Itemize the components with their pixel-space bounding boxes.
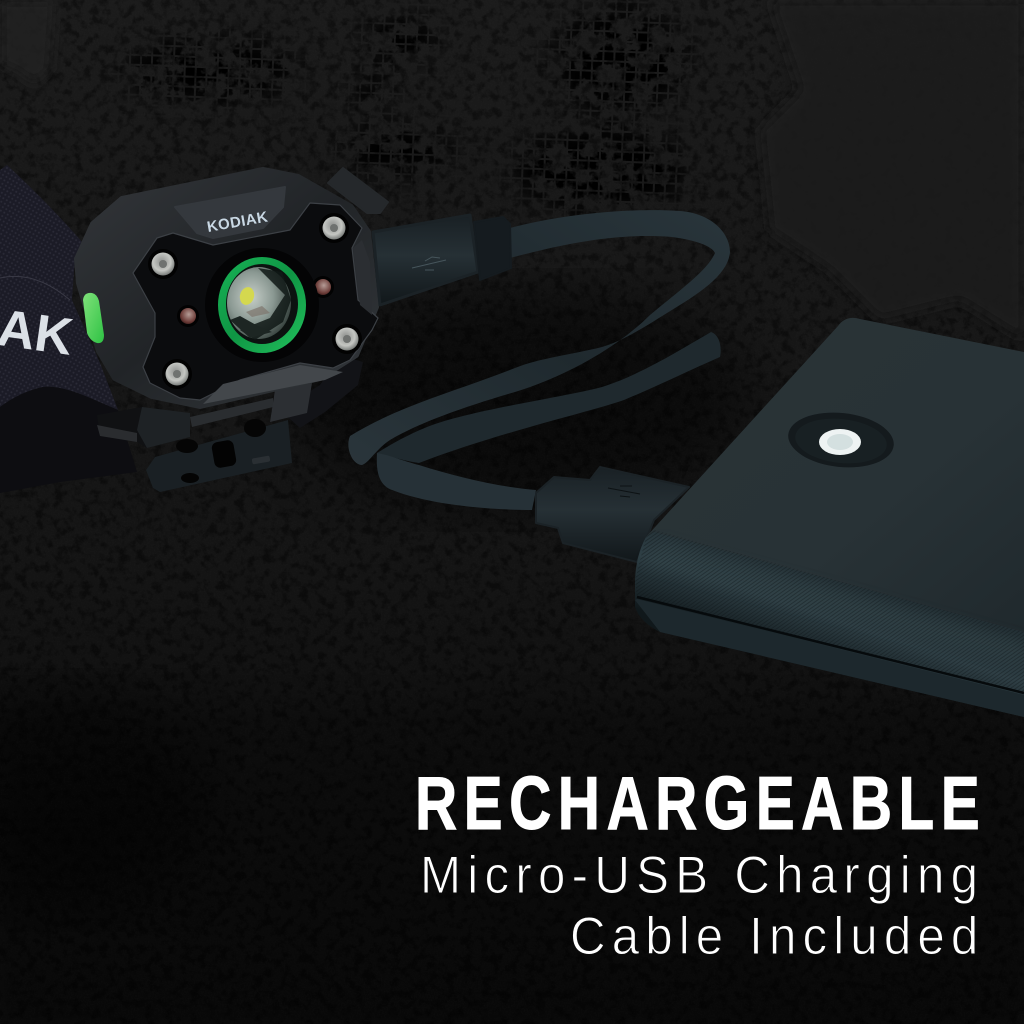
lower clip (146, 419, 292, 492)
mode knob (328, 168, 388, 213)
right facet (353, 240, 372, 315)
mount strip (97, 425, 137, 442)
lens and green ring (205, 248, 319, 362)
logo plate (175, 187, 285, 238)
power bank (635, 318, 1024, 717)
power button (785, 408, 897, 472)
top face (646, 318, 1024, 632)
screws (148, 213, 362, 389)
red indicator LEDs (177, 276, 334, 327)
seam line (637, 597, 1024, 693)
rear arc band (280, 355, 363, 428)
USB symbol (412, 257, 446, 270)
body shell (77, 170, 376, 406)
subtitle line 2: Cable Included (570, 906, 978, 965)
edge band (635, 530, 1024, 717)
mount base (97, 407, 190, 448)
background: dark concrete wall (0, 0, 1024, 693)
headband strap (0, 165, 137, 493)
lower lip (635, 599, 1024, 717)
cable upper loop (348, 210, 730, 465)
headlamp (77, 168, 388, 492)
USB symbol (608, 486, 640, 497)
brand name: KODIAK (206, 209, 269, 236)
highlight band (645, 540, 1024, 665)
subtitle line 1: Micro-USB Charging (420, 845, 978, 904)
charging cable (348, 210, 730, 562)
cable bottom segment (377, 453, 536, 510)
edge twill texture (635, 530, 1024, 693)
upper bracket (137, 383, 312, 448)
lower grey plate (203, 365, 343, 404)
headlamp USB connector (373, 215, 511, 305)
faceplate (133, 203, 378, 400)
title: RECHARGEABLE (415, 762, 980, 846)
power bank USB connector (536, 467, 689, 562)
cable lower strand (377, 332, 721, 463)
green power button (83, 293, 104, 343)
